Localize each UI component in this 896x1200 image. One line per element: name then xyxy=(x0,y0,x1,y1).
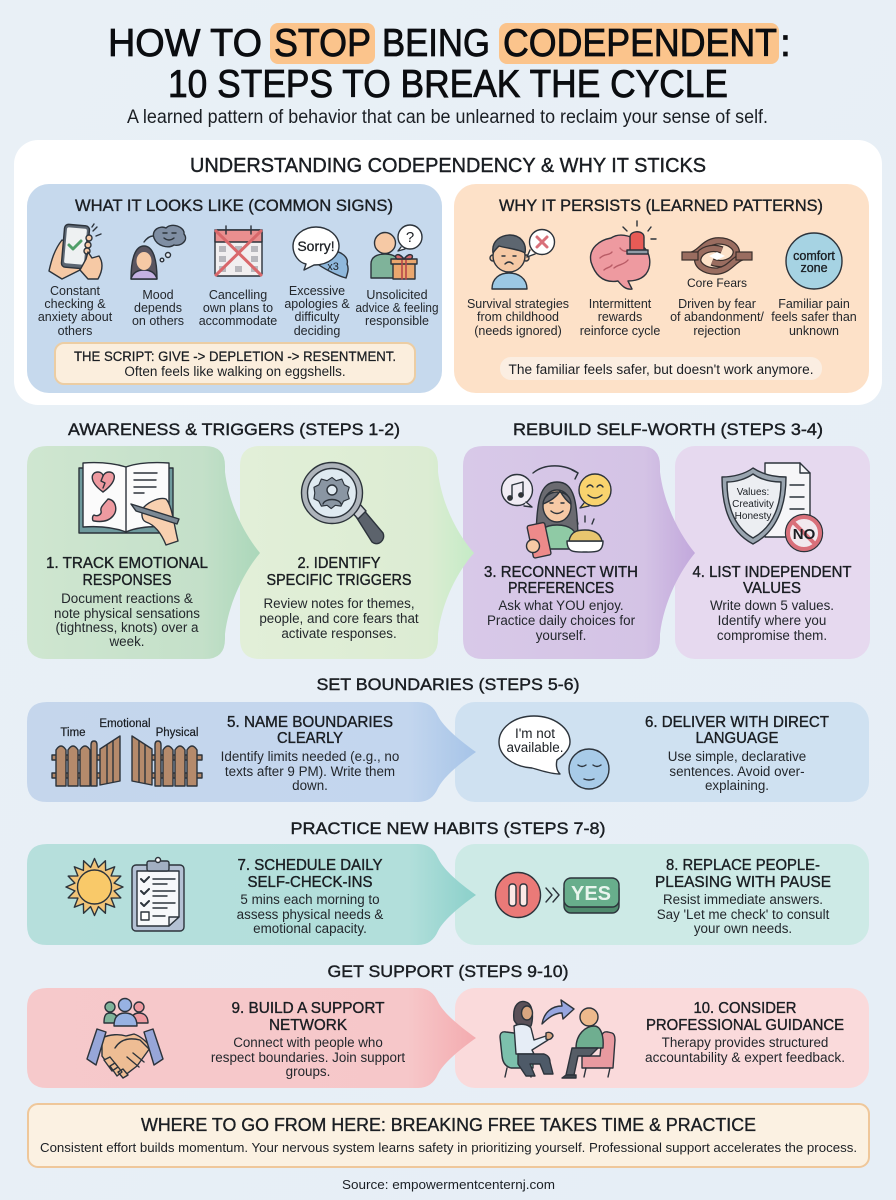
text: step 9: NETWORK xyxy=(269,1017,347,1034)
icon: comfort zone circle: comfort xyxy=(793,249,835,263)
callout: the script xyxy=(55,343,415,384)
icon: chevrons xyxy=(546,888,559,902)
list: persists labels: feels safer than xyxy=(771,310,857,324)
text: step 9: groups. xyxy=(286,1064,330,1079)
icon: pause button xyxy=(496,872,540,918)
text: step 2 xyxy=(259,555,419,641)
text: step 4: 4. LIST INDEPENDENT xyxy=(692,564,852,581)
text: step 9: Connect with people who xyxy=(233,1035,383,1050)
callout: where to go from here: WHERE TO GO FROM HERE: BREAKING FREE TAKES TIME & PRACTICE xyxy=(141,1115,756,1135)
text: step 10: accountability & expert feedback. xyxy=(645,1050,845,1065)
panel: step 8 xyxy=(455,844,869,945)
list: common signs labels: deciding xyxy=(294,324,340,338)
heading: awareness and triggers: AWARENESS & TRIGGERS (STEPS 1-2) xyxy=(68,420,400,439)
list: persists labels: from childhood xyxy=(477,310,559,324)
text: step 8: 8. REPLACE PEOPLE- xyxy=(666,857,820,874)
text: step 6 xyxy=(645,714,829,793)
text: step 4: Write down 5 values. xyxy=(710,598,834,613)
text: step 9 xyxy=(211,1000,405,1079)
label: values list: Values: xyxy=(737,487,769,498)
text: step 10 xyxy=(645,1000,845,1065)
list: common signs labels: Cancelling xyxy=(209,288,267,302)
text: step 1: 1. TRACK EMOTIONAL xyxy=(46,555,208,572)
icon: values shield and document xyxy=(722,463,822,552)
text: step 1: note physical sensations xyxy=(54,606,200,621)
panel: step 1 xyxy=(27,446,260,659)
text: step 5: down. xyxy=(292,778,328,793)
text: step 2: Review notes for themes, xyxy=(263,596,415,611)
label: no: NO xyxy=(793,526,816,543)
text: step 5 xyxy=(221,714,399,793)
text: step 6: 6. DELIVER WITH DIRECT xyxy=(645,714,829,731)
text: step 5: CLEARLY xyxy=(277,730,343,747)
panel: step 6 xyxy=(455,702,869,802)
icon: sorry speech bubbles: Sorry! xyxy=(297,238,335,254)
title: : xyxy=(780,22,791,65)
icon: journal with heart, stomach and hand xyxy=(79,463,179,545)
label: values list: Creativity xyxy=(732,499,774,510)
title: BEING xyxy=(382,22,490,65)
text: step 3: Practice daily choices for xyxy=(487,613,636,628)
title: STOP xyxy=(274,22,371,65)
icon: yes button: YES xyxy=(571,883,611,905)
text: step 2: 2. IDENTIFY xyxy=(298,555,381,572)
text: step 8: Say 'Let me check' to consult xyxy=(657,907,830,922)
list: persists labels: Driven by fear xyxy=(678,297,756,311)
heading: understanding: UNDERSTANDING CODEPENDENCY & WHY IT STICKS xyxy=(190,155,706,177)
panel: why it persists xyxy=(454,184,869,393)
list: common signs labels xyxy=(38,284,439,338)
icon: not available speech bubble xyxy=(499,716,570,774)
icon: crossed-out calendar xyxy=(215,226,262,276)
heading: rebuild self-worth: REBUILD SELF-WORTH (STEPS 3-4) xyxy=(513,420,823,439)
list: common signs labels: accommodate xyxy=(199,314,277,328)
text: step 7 xyxy=(237,857,383,936)
text: step 10: Therapy provides structured xyxy=(662,1035,828,1050)
text: step 4 xyxy=(692,564,852,643)
list: common signs labels: on others xyxy=(132,314,184,328)
text: step 2: activate responses. xyxy=(281,626,397,641)
icon: magnifying glass with gear xyxy=(302,462,384,544)
heading: practice new habits: PRACTICE NEW HABITS (STEPS 7-8) xyxy=(290,819,606,838)
icon: group of people xyxy=(104,998,148,1026)
icon: sorry speech bubbles xyxy=(293,227,348,278)
list: persists labels: of abandonment/ xyxy=(670,310,764,324)
text: step 5: 5. NAME BOUNDARIES xyxy=(227,714,393,731)
list: common signs labels: Mood xyxy=(142,288,174,302)
text: step 7: assess physical needs & xyxy=(237,907,383,922)
text: step 8: Resist immediate answers. xyxy=(663,892,823,907)
icon: therapy session xyxy=(500,1000,615,1078)
icon: yes button xyxy=(564,878,619,913)
text: step 7: 5 mins each morning to xyxy=(240,892,380,907)
icon: question mark: ? xyxy=(406,229,414,246)
list: persists labels: (needs ignored) xyxy=(474,324,562,338)
title xyxy=(108,22,791,106)
list: persists labels: Intermittent xyxy=(589,297,652,311)
panel: step 2 xyxy=(240,446,474,659)
text: step 8 xyxy=(655,857,831,936)
icon: woman with preferences xyxy=(502,466,611,558)
list: persists labels: Survival strategies xyxy=(467,297,569,311)
panel: step 7 xyxy=(27,844,476,945)
list: common signs labels: Constant xyxy=(50,284,101,298)
list: persists labels: Familiar pain xyxy=(778,297,850,311)
text: step 10: PROFESSIONAL GUIDANCE xyxy=(646,1017,844,1034)
list: common signs labels: Excessive xyxy=(289,284,345,298)
icon: comfort zone circle xyxy=(786,233,842,289)
list: persists labels: unknown xyxy=(789,324,839,338)
text: step 5: Identify limits needed (e.g., no xyxy=(221,749,399,764)
label: core fears: Core Fears xyxy=(687,276,747,290)
text: step 4: Identify where you xyxy=(718,613,826,628)
icon: person with gift xyxy=(371,225,422,279)
callout: the script: THE SCRIPT: GIVE -> DEPLETION -> RESENTMENT. xyxy=(74,349,396,364)
text: step 6: Use simple, declarative xyxy=(668,749,806,764)
panel: step 4 xyxy=(675,446,870,659)
list: common signs labels: apologies & xyxy=(284,297,350,311)
text: step 5: texts after 9 PM). Write them xyxy=(225,764,395,779)
text: step 2: SPECIFIC TRIGGERS xyxy=(266,572,412,589)
text: step 4: compromise them. xyxy=(717,628,827,643)
text: step 3: PREFERENCES xyxy=(508,580,614,597)
icon: not available speech bubble: I'm not xyxy=(515,726,555,741)
list: persists labels xyxy=(467,297,857,338)
callout: familiar feels safer xyxy=(500,357,822,380)
text: step 9: respect boundaries. Join support xyxy=(211,1050,405,1065)
list: common signs labels: Unsolicited xyxy=(366,288,428,302)
title: CODEPENDENT xyxy=(503,22,777,65)
source: Source: empowermentcenternj.com xyxy=(342,1177,555,1192)
heading: learned patterns: WHY IT PERSISTS (LEARNED PATTERNS) xyxy=(499,196,823,215)
panel: step 10 xyxy=(455,988,869,1088)
text: step 8: your own needs. xyxy=(694,921,792,936)
panel: step 9 xyxy=(27,988,476,1088)
label: values list: Honesty xyxy=(735,511,771,522)
text: step 4: VALUES xyxy=(743,580,801,597)
icon: sun xyxy=(66,858,123,916)
icon: core fears knot xyxy=(682,241,752,271)
text: step 3: Ask what YOU enjoy. xyxy=(498,598,624,613)
text: step 3: 3. RECONNECT WITH xyxy=(484,564,638,581)
icon: checklist clipboard xyxy=(132,858,184,931)
callout: where to go from here xyxy=(28,1104,869,1167)
label: values list xyxy=(732,487,774,522)
title: HOW TO xyxy=(108,22,262,65)
panel: understanding codependency xyxy=(14,140,882,405)
panel: step 5 xyxy=(27,702,476,802)
text: step 2: people, and core fears that xyxy=(259,611,419,626)
text: step 3 xyxy=(484,564,638,643)
list: common signs labels: own plans to xyxy=(203,301,273,315)
list: persists labels: reinforce cycle xyxy=(580,324,660,338)
icon: sorry speech bubbles: x3 xyxy=(327,261,339,273)
list: persists labels: rejection xyxy=(693,324,741,338)
label: physical boundary: Physical xyxy=(156,727,198,739)
icon: mood person with cloud xyxy=(131,225,186,279)
list: common signs labels: checking & xyxy=(44,297,106,311)
title: 10 STEPS TO BREAK THE CYCLE xyxy=(168,63,728,106)
icon: not available speech bubble: available. xyxy=(506,740,564,755)
list: common signs labels: advice & feeling xyxy=(356,301,439,315)
text: step 1: week. xyxy=(109,634,144,649)
icon: phone in hand xyxy=(49,224,102,279)
text: step 6: explaining. xyxy=(705,778,769,793)
panel: what it looks like xyxy=(27,184,442,393)
text: step 1: RESPONSES xyxy=(82,572,172,589)
icon: sad child xyxy=(490,230,554,289)
list: common signs labels: anxiety about xyxy=(38,310,113,324)
callout: the script: Often feels like walking on eggshells. xyxy=(124,364,346,379)
icon: brain with alarm xyxy=(591,221,656,289)
text: step 1: Document reactions & xyxy=(61,591,193,606)
text: step 3: yourself. xyxy=(536,628,586,643)
icon: handshake xyxy=(87,1029,163,1078)
text: step 1 xyxy=(46,555,208,649)
text: step 7: 7. SCHEDULE DAILY xyxy=(238,857,383,874)
text: step 6: LANGUAGE xyxy=(696,730,778,747)
text: step 7: SELF-CHECK-INS xyxy=(248,874,372,891)
text: step 8: PLEASING WITH PAUSE xyxy=(655,874,831,891)
text: step 9: 9. BUILD A SUPPORT xyxy=(232,1000,385,1017)
icon: calm face xyxy=(569,749,609,789)
label: emotional boundary: Emotional xyxy=(99,718,151,730)
label: time boundary: Time xyxy=(60,727,86,739)
list: common signs labels: difficulty xyxy=(295,310,340,324)
callout: where to go from here: Consistent effort builds momentum. Your nervous system learns safety in prioritizing yourself. Professional support accelerates the process. xyxy=(40,1140,857,1155)
list: persists labels: rewards xyxy=(598,310,642,324)
panel: step 3 xyxy=(463,446,695,659)
text: step 6: sentences. Avoid over- xyxy=(669,764,805,779)
list: common signs labels: depends xyxy=(134,301,182,315)
heading: common signs: WHAT IT LOOKS LIKE (COMMON SIGNS) xyxy=(75,196,393,215)
icon: fence with open gate xyxy=(52,736,202,786)
heading: get support: GET SUPPORT (STEPS 9-10) xyxy=(328,962,568,981)
icon: comfort zone circle: zone xyxy=(800,261,828,275)
text: step 10: 10. CONSIDER xyxy=(694,1000,796,1017)
subtitle: A learned pattern of behavior that can be unlearned to reclaim your sense of self. xyxy=(127,107,768,128)
list: common signs labels: responsible xyxy=(365,314,429,328)
text: step 1: (tightness, knots) over a xyxy=(56,620,199,635)
text: step 7: emotional capacity. xyxy=(253,921,367,936)
heading: set boundaries: SET BOUNDARIES (STEPS 5-6) xyxy=(316,675,580,694)
callout: familiar feels safer: The familiar feels safer, but doesn't work anymore. xyxy=(508,362,814,377)
list: common signs labels: others xyxy=(58,324,92,338)
